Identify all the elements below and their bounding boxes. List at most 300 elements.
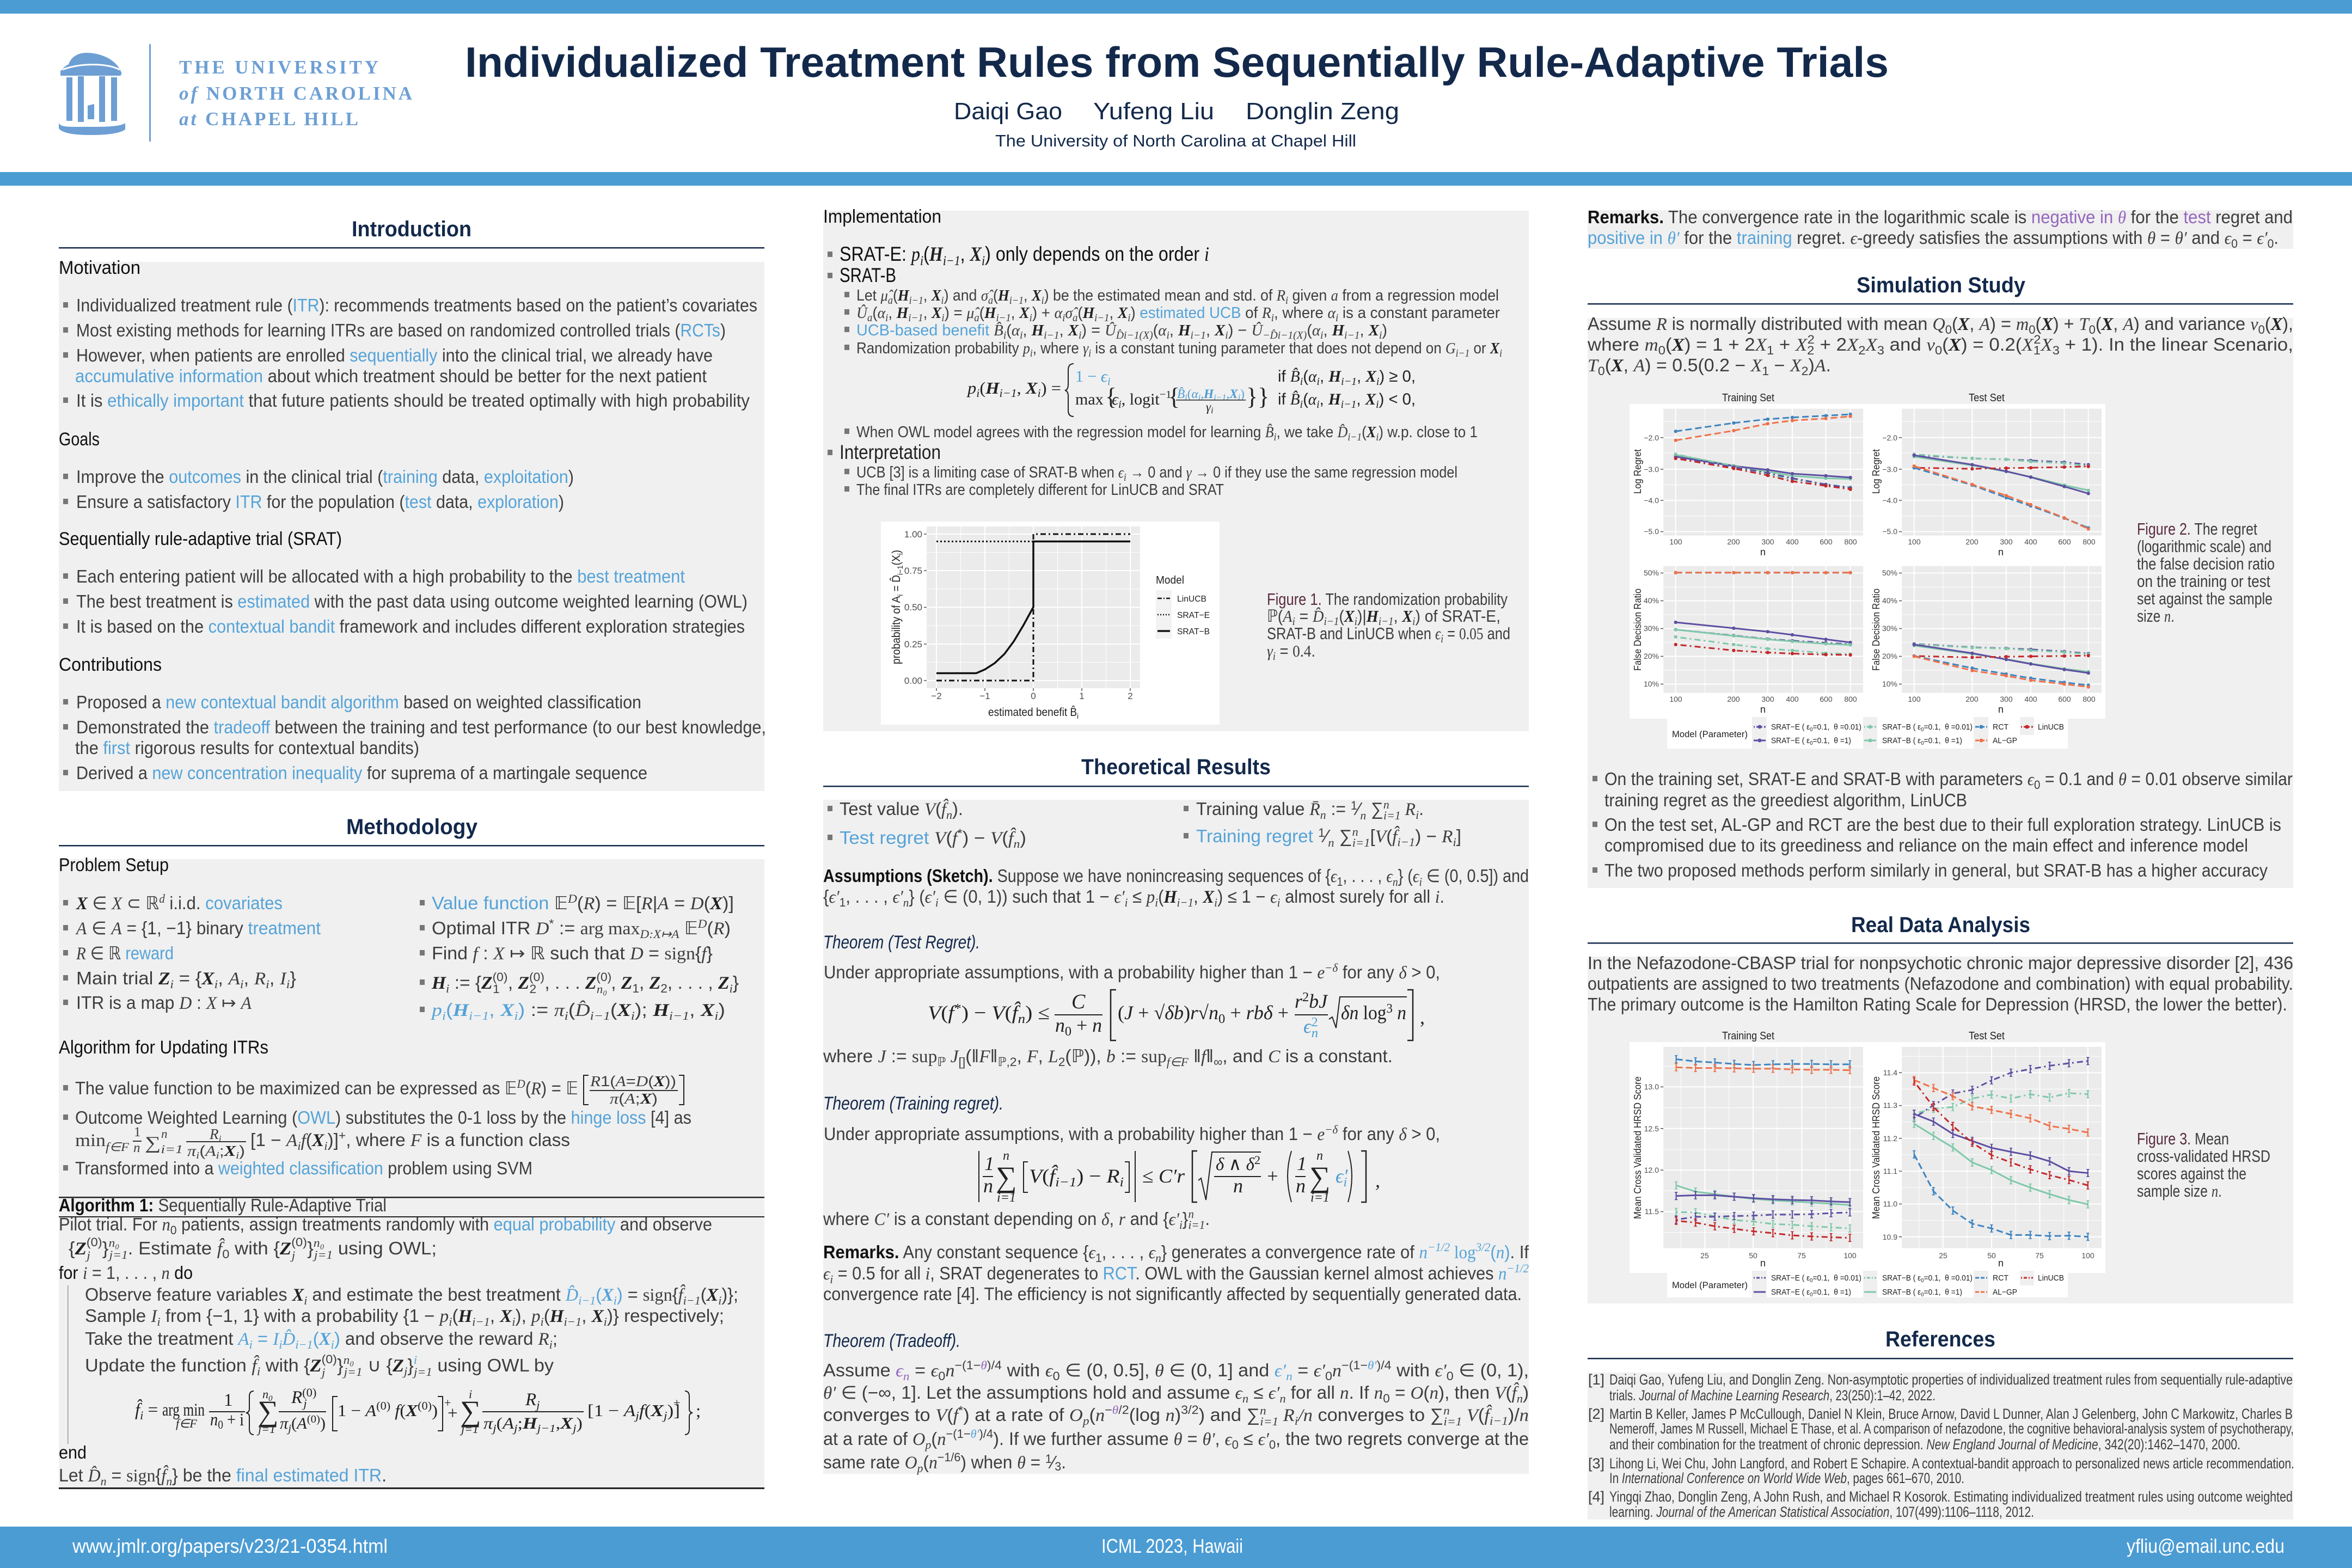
theorem: training regret: Theorem (Training regret).	[823, 1093, 1003, 1114]
theorem: test regret: f‖	[1201, 1046, 1214, 1067]
equation: randomization probability: i−1	[1341, 376, 1357, 388]
theorem: tradeoff: n	[1332, 1361, 1342, 1381]
right: test set HRSD	[1914, 1061, 2088, 1237]
authors: Yufeng Liu	[1093, 98, 1214, 125]
equation: update rule: arg min	[162, 1400, 205, 1420]
series: SRAT-E	[936, 541, 1130, 542]
theorem: tradeoff: i−1	[1490, 1414, 1508, 1428]
equation: randomization probability: {	[1168, 383, 1180, 410]
equation: training regret bound: i	[1120, 1175, 1124, 1190]
list: SRAT implementation: ) and	[944, 287, 981, 304]
axis labels: −3.0	[1882, 465, 1897, 474]
equation: randomization probability: ϵ	[1112, 390, 1118, 408]
subheading: Contributions: Contributions	[59, 654, 162, 675]
equation: training regret bound: ϵ′	[1336, 1165, 1347, 1187]
list: algorithm bullets: n	[133, 1141, 140, 1155]
theorem: training regret: for any	[1338, 1124, 1399, 1144]
text: remarks on convergence: 3/2	[1475, 1240, 1490, 1254]
algorithm pseudocode: Sample I	[85, 1306, 157, 1326]
axis labels: 10.9	[1883, 1233, 1897, 1241]
text: simulation setup: + 1). In the linear Scenario,	[2060, 334, 2293, 354]
algorithm pseudocode: j	[320, 1365, 325, 1379]
axis labels: 100	[1908, 537, 1921, 546]
list: regret definitions: i=1	[1352, 836, 1370, 849]
list: SRAT implementation: H	[1031, 322, 1045, 339]
list: problem setup right: ,	[508, 972, 518, 993]
authors	[954, 98, 1399, 125]
equation: randomization probability: i	[1376, 399, 1379, 411]
theorem: tradeoff: .	[1061, 1452, 1066, 1472]
equation: training regret bound: 1	[1297, 1153, 1307, 1174]
list: contributions bullets: Demonstrated the tradeoff between the training and test performance (to our best knowledge,	[76, 717, 766, 737]
chart: figure 2 regret and false decision ratio	[1630, 392, 2105, 749]
text: simulation setup	[1587, 314, 2293, 378]
axis labels: −2.0	[1644, 433, 1659, 442]
list: contributions bullets	[63, 692, 766, 783]
caption: figure 1: =	[1443, 624, 1459, 643]
theorem: tradeoff: O	[1069, 1406, 1083, 1425]
theorem: tradeoff: 0	[1383, 1392, 1390, 1405]
equation: randomization probability: ,	[1017, 378, 1026, 397]
list: algorithm bullets: R1(A=D(X))	[590, 1073, 676, 1089]
caption: figure 2: size n.	[2137, 607, 2175, 626]
text: assumptions: (	[1158, 886, 1163, 906]
list: problem setup right: i−1	[590, 1009, 610, 1022]
panel: remarks: .	[2274, 228, 2278, 248]
list: SRAT implementation: H	[897, 287, 910, 304]
list: SRAT implementation: i−1	[1094, 312, 1109, 324]
list: algorithm bullets: )]	[328, 1130, 339, 1150]
list: SRAT implementation: γ → 0 if they use the same regression model	[1186, 464, 1496, 481]
axis labels: Mean Cross Validated HRSD Score	[1632, 1076, 1643, 1219]
axis labels: −2.0	[1882, 433, 1897, 442]
list: problem setup right: i	[514, 1009, 518, 1022]
reference 4	[1588, 1489, 2293, 1520]
text: remarks on convergence: convergence rate [4]. The efficiency is not significantly affected by sequentially generated data.	[823, 1284, 1522, 1304]
list: SRAT implementation: σ̂	[981, 287, 994, 304]
text: assumptions: ≤	[1128, 886, 1147, 906]
equation: randomization probability: X	[1025, 378, 1038, 397]
list: SRAT implementation: i	[1042, 295, 1044, 307]
reference 3: In International Conference on World Wide Web, pages 661–670, 2010.	[1609, 1470, 1964, 1486]
text: simulation setup: 0	[1658, 344, 1665, 357]
theorem: test regret: Theorem (Test Regret).	[823, 932, 980, 953]
algorithm pseudocode: p	[439, 1307, 449, 1326]
equation: randomization probability: i	[1300, 376, 1303, 388]
text: simulation setup: Assume R is normally distributed with mean Q	[1588, 314, 1945, 334]
theorem: tradeoff: n	[1260, 1404, 1266, 1417]
theorem: tradeoff: R	[1278, 1406, 1295, 1425]
algorithm pseudocode: using OWL by	[432, 1355, 554, 1375]
text: remarks on convergence: −1/2	[1428, 1240, 1450, 1254]
theorem: tradeoff: n	[1520, 1406, 1529, 1425]
equation: update rule: (0)	[418, 1399, 432, 1412]
list: simulation findings: On the test set, AL-GP and RCT are the best due to their full exploration strategy. LinUCB is	[1604, 814, 2281, 835]
list: algorithm bullets: f∈F	[106, 1140, 129, 1154]
axis tick labels: 0.00	[904, 676, 922, 686]
theorem: tradeoff: 3	[1055, 1460, 1061, 1473]
heading: Theoretical Results: Theoretical Results	[1081, 755, 1271, 779]
list: regret definitions: )	[1020, 828, 1026, 848]
list: SRAT implementation: i	[1020, 329, 1023, 341]
theorem: tradeoff: n	[903, 1369, 910, 1383]
equation: update rule: )]	[667, 1401, 680, 1420]
list: problem setup right: D̂	[574, 1000, 590, 1020]
algorithm pseudocode: i	[257, 1364, 260, 1378]
list: SRAT implementation: ,	[1011, 304, 1019, 322]
text: remarks on convergence: i	[830, 1272, 833, 1286]
list: problem setup right: R) = 𝔼[R|A = D(X)]	[583, 893, 733, 914]
list: SRAT implementation: H	[1332, 322, 1345, 339]
list: problem setup right: := π	[530, 1000, 563, 1020]
axis tick labels: 2	[1128, 691, 1133, 701]
axis labels: 400	[2024, 537, 2037, 546]
list: SRAT implementation: ) =	[1081, 322, 1105, 339]
algorithm pseudocode: p	[530, 1307, 541, 1326]
algorithm pseudocode: final estimated ITR.	[236, 1465, 387, 1485]
list: regret definitions: n	[1383, 798, 1389, 811]
list: SRAT implementation: α	[1158, 322, 1167, 339]
theorem: tradeoff: ) and ∑	[1199, 1405, 1260, 1425]
text: assumptions: i	[1214, 896, 1217, 909]
panel: real data analysis	[1588, 953, 2293, 1303]
equation: update rule	[135, 1386, 701, 1436]
list: simulation findings: training regret as the greediest algorithm, LinUCB	[1604, 790, 1967, 810]
list: problem setup right: D	[697, 917, 707, 930]
equation: update rule: 0	[268, 1394, 273, 1403]
equation: randomization probability: (	[1303, 367, 1308, 385]
list: SRAT implementation: , where	[1274, 304, 1327, 322]
legend: figure 2: LinUCB	[2038, 722, 2064, 732]
equation: randomization probability: H	[1328, 390, 1342, 408]
list: SRAT implementation: a from a regression model	[1331, 287, 1513, 304]
equation: test regret bound: ) ≤	[1025, 1002, 1050, 1024]
theorem: tradeoff: n	[945, 1361, 954, 1381]
text: simulation setup: 2	[1858, 344, 1865, 357]
legend: figure 3: SRAT−E ( ε	[1771, 1288, 1814, 1297]
list: SRAT implementation: , where	[1033, 340, 1083, 357]
algorithm pseudocode: ,	[490, 1306, 500, 1326]
legend: figure 3: =0.1, θ =1)	[1813, 1288, 1851, 1297]
axis labels: False Decision Ratio	[1632, 589, 1643, 671]
equation: update rule: j	[535, 1398, 540, 1412]
list: problem setup left: i	[286, 977, 290, 991]
list: SRAT implementation: X	[1031, 287, 1042, 304]
list: SRAT implementation: is a constant parameter	[1338, 304, 1500, 322]
equation: randomization probability: α	[1308, 390, 1317, 408]
theorem: training regret: }	[1183, 1209, 1188, 1229]
text: real data description	[1588, 953, 2293, 1014]
authors: Daiqi Gao	[954, 98, 1062, 125]
list: SRAT implementation: α	[1055, 304, 1063, 322]
list: SRAT implementation: X	[1368, 322, 1380, 339]
list: SRAT implementation: Let μ̂	[856, 287, 889, 304]
equation: test regret bound: V(f	[928, 1002, 953, 1024]
text: assumptions: ϵ	[1270, 887, 1278, 907]
equation: update rule: j	[491, 1423, 497, 1435]
list: regret definitions: i	[1416, 808, 1419, 822]
equation: update rule: (0)	[307, 1413, 320, 1425]
theorem: test regret: ℙ,2	[998, 1055, 1016, 1069]
subheading: Goals: Goals	[59, 429, 100, 450]
list: algorithm bullets: f	[301, 1131, 308, 1150]
axis labels: 50%	[1882, 568, 1897, 577]
theorem: tradeoff: converges to V(f	[823, 1405, 958, 1425]
legend: figure 3: =0.1, θ =0.01)	[1924, 1273, 1973, 1283]
list: problem setup right: (0)	[529, 970, 544, 984]
list: SRAT implementation: → 0 and	[1126, 464, 1186, 481]
equation: update rule: ∑	[460, 1395, 481, 1428]
list: algorithm bullets: (	[525, 1078, 531, 1098]
equation: training regret bound: +	[1266, 1165, 1279, 1187]
axis labels: 200	[1965, 537, 1979, 546]
theorem: tradeoff: 3/2	[1181, 1403, 1199, 1417]
list: problem setup right: p	[431, 1001, 442, 1020]
axis tick labels: 0.75	[904, 566, 922, 576]
algorithm pseudocode: } be the	[172, 1465, 236, 1485]
list: SRAT implementation: a	[888, 295, 893, 307]
axis title: y: (X	[890, 555, 903, 565]
legend: SRAT−E	[1177, 611, 1210, 620]
algorithm pseudocode: end	[59, 1442, 87, 1462]
theorem: tradeoff: n	[929, 1453, 938, 1473]
equation: update rule: ;	[696, 1401, 701, 1421]
list: SRAT implementation: i	[1124, 471, 1126, 483]
equation: randomization probability: −1	[1160, 389, 1171, 401]
theorem: training regret: Under appropriate assumptions, with a probability higher than 1 − e	[824, 1124, 1344, 1144]
list: problem setup right: , . . . ,	[667, 972, 718, 993]
axis labels: n	[1760, 547, 1766, 558]
panel: remarks: =	[2238, 228, 2257, 248]
algorithm pseudocode: and observe the reward R	[345, 1328, 549, 1349]
list: simulation findings: θ = 0.01 observe similar	[2118, 769, 2308, 789]
axis labels: Log Regret	[1871, 449, 1882, 494]
theorem: test regret: for any	[1338, 962, 1399, 982]
list: problem setup right: i	[631, 1009, 635, 1022]
list: SRAT implementation: SRAT-B	[840, 264, 896, 286]
subheading: SRAT: Sequentially rule-adaptive trial (SRAT)	[59, 529, 342, 549]
bottom-right: test false decision ratio	[1914, 644, 2088, 687]
text: remarks on convergence: } generates a convergence rate of	[1161, 1242, 1419, 1262]
algorithm pseudocode: ∪ {	[362, 1355, 393, 1375]
equation: randomization probability: ) =	[1041, 378, 1061, 397]
text: simulation setup: X) + T	[2041, 314, 2089, 334]
list: SRAT implementation: ,	[1059, 322, 1068, 339]
legend: figure 3: SRAT−B ( ε	[1882, 1288, 1925, 1297]
equation: test regret bound: n	[1055, 1014, 1065, 1036]
footer: paper link: www.jmlr.org/papers/v23/21-0354.html	[72, 1535, 388, 1557]
text: assumptions	[823, 866, 1529, 909]
theorem: tradeoff: 0	[1325, 1369, 1332, 1383]
theorem: tradeoff: (f̂	[1478, 1405, 1490, 1425]
text: remarks on convergence: 1	[1095, 1251, 1102, 1265]
equation: update rule: A	[503, 1414, 512, 1432]
equation: update rule: =	[143, 1400, 158, 1420]
list: problem setup left: covariates	[205, 893, 283, 913]
panel: references	[1588, 1371, 2294, 1520]
theorem: test regret: , and	[1222, 1046, 1268, 1066]
equation: training regret bound: i−1	[1055, 1175, 1076, 1190]
algorithm pseudocode: ;	[553, 1328, 558, 1349]
equation: randomization probability: i	[1300, 399, 1303, 411]
caption: figure 1: =	[1276, 641, 1293, 660]
theorem: tradeoff: ). If we further assume	[993, 1429, 1174, 1449]
text: remarks on convergence: = 0.5 for all	[833, 1263, 926, 1283]
axis title: y: )	[890, 550, 903, 553]
equation: training regret bound: δ ∧ δ	[1216, 1155, 1254, 1174]
list: SRAT implementation: (	[1077, 304, 1083, 322]
algorithm title: Algorithm 1: Sequentially Rule-Adaptive Trial	[59, 1195, 387, 1215]
legend: figure 2: 0	[1810, 727, 1813, 733]
list: regret definitions: [	[1370, 826, 1375, 846]
text: simulation setup: 0	[1598, 364, 1605, 378]
list: SRAT implementation: i	[1271, 312, 1274, 324]
algorithm pseudocode: n	[101, 1474, 107, 1488]
algorithm pseudocode: i−1	[295, 1338, 313, 1351]
axis labels: 20%	[1882, 652, 1897, 660]
list: regret definitions: n	[1320, 808, 1326, 822]
caption: figure 1: i	[1273, 650, 1276, 663]
list: algorithm bullets: A	[204, 1143, 216, 1159]
algorithm pseudocode: Update the function f̂	[85, 1355, 256, 1376]
list: algorithm bullets: Transformed into a weighted classification problem using SVM	[75, 1158, 532, 1178]
list: problem setup right: X	[700, 1001, 715, 1020]
plot titles: Test Set	[1969, 1030, 2005, 1042]
axis labels: 300	[2000, 695, 2013, 703]
axis labels: 600	[2058, 537, 2071, 546]
text: simulation setup: 0	[2258, 323, 2265, 336]
equation: training regret bound: ) −	[1076, 1165, 1106, 1187]
theorem: test regret: 2	[1058, 1055, 1065, 1069]
reference 4: learning. Journal of the American Statistical Association, 107(499):1106–1118, 2012.	[1609, 1504, 2034, 1520]
list: SRAT implementation: ) w.p. close to 1	[1379, 424, 1478, 441]
list: SRAT implementation: D̂i−1(X)	[1116, 329, 1153, 341]
list: problem setup right: Z	[649, 973, 660, 993]
equation: randomization probability: γ	[1206, 400, 1211, 414]
theorem: tradeoff: ϵ′	[1314, 1361, 1326, 1381]
algorithm pseudocode: i	[541, 1315, 544, 1328]
equation: test regret bound: ϵ	[1303, 1015, 1312, 1037]
list: problem setup left: d	[159, 892, 166, 905]
list: problem setup right: 2	[530, 982, 536, 996]
equation: update rule: j−1	[535, 1423, 556, 1435]
list: goals bullets: Ensure a satisfactory ITR for the population (test data, exploration)	[76, 492, 564, 512]
equation: randomization probability: ,	[1320, 390, 1328, 408]
theorem: tradeoff: /n	[1297, 1406, 1313, 1425]
algorithm pseudocode: j	[402, 1364, 407, 1378]
list: problem setup left: i	[215, 977, 218, 991]
equation: update rule: i	[469, 1387, 472, 1401]
series: SRAT-B	[936, 541, 1130, 673]
theorem: tradeoff: −(1−	[946, 1427, 971, 1441]
axis labels: 11.2	[1883, 1134, 1897, 1143]
list: problem setup left: ,	[218, 968, 229, 988]
text: simulation setup: X	[1846, 335, 1859, 355]
equation: training regret bound: n	[1233, 1175, 1243, 1197]
equation: training regret bound: n	[1296, 1175, 1306, 1197]
theorem: tradeoff: *	[958, 1404, 964, 1417]
list: problem setup right: ,	[639, 972, 650, 993]
algorithm pseudocode: X	[499, 1307, 512, 1326]
equation: randomization probability: i	[1118, 399, 1122, 411]
list: SRAT implementation: is a constant tuning parameter that does not depend on	[1091, 340, 1445, 357]
list: problem setup right: n₀	[597, 982, 607, 996]
text: simulation setup: X	[1864, 335, 1878, 355]
caption: figure 2: Figure 2. The regret	[2137, 519, 2257, 538]
plot titles	[1722, 392, 2005, 404]
theorem: test regret: ‖	[1189, 1046, 1201, 1066]
caption: figure 3: scores against the	[2137, 1164, 2246, 1183]
list: SRAT implementation	[828, 243, 1502, 499]
equation: update rule: ∑	[258, 1395, 279, 1428]
list: algorithm bullets: D	[517, 1077, 525, 1091]
legend: figure 2: SRAT−B ( ε	[1882, 736, 1925, 745]
list: SRAT implementation: a	[867, 312, 873, 324]
equation: test regret bound: +	[1071, 1014, 1092, 1036]
list: regret definitions: :=	[1326, 799, 1351, 819]
list: SRAT implementation: ,	[1024, 287, 1032, 304]
list: SRAT implementation: X	[1214, 322, 1226, 339]
list: problem setup right: (	[577, 893, 583, 913]
list: SRAT implementation: i	[1079, 329, 1081, 341]
list: SRAT implementation: Û	[856, 304, 868, 322]
theorem: training regret: .	[1205, 1209, 1210, 1229]
list: SRAT implementation: R	[1276, 287, 1285, 304]
theorem: test regret: F‖	[979, 1046, 997, 1067]
legend: figure 2: SRAT−E ( ε	[1771, 722, 1814, 732]
list: SRAT implementation: )	[1131, 304, 1140, 322]
caption: figure 1: Figure 1. The randomization probability	[1267, 590, 1508, 609]
equation: randomization probability: ,	[1226, 387, 1229, 401]
caption: figure 1: ,	[1394, 607, 1402, 626]
caption: figure 1: X	[1401, 607, 1413, 626]
axis labels: Log Regret	[1632, 449, 1643, 494]
caption: figure 1: γ	[1267, 641, 1273, 660]
text: remarks on convergence: −1/2	[1506, 1261, 1529, 1275]
equation: update rule: )	[432, 1401, 438, 1420]
algorithm pseudocode: {Z	[69, 1238, 86, 1259]
list: SRAT implementation: (	[1153, 322, 1159, 339]
equation: randomization probability: (	[1187, 387, 1192, 401]
list: regret definitions: n	[1328, 836, 1334, 849]
equation: update rule: f	[639, 1401, 647, 1420]
algorithm pseudocode: D̂	[565, 1285, 578, 1305]
list: problem setup left: X	[201, 969, 215, 989]
text: remarks on convergence: n	[1419, 1243, 1428, 1263]
icon: UNC Old Well logo	[59, 53, 125, 135]
axis labels: 200	[1965, 695, 1979, 703]
algorithm pseudocode: ),	[516, 1306, 531, 1326]
algorithm pseudocode: i−1	[683, 1294, 701, 1307]
theorem: tradeoff: n	[1443, 1404, 1450, 1417]
axis tick labels	[904, 529, 1133, 701]
equation: randomization probability: i	[1316, 399, 1320, 411]
text: assumptions: ϵ′	[925, 887, 936, 907]
equation: randomization probability: if B̂	[1278, 367, 1300, 385]
axis labels: n	[1760, 1258, 1766, 1269]
caption: figure 1: (	[1339, 607, 1344, 626]
algorithm pseudocode: Z	[310, 1356, 321, 1376]
axis labels: 11.3	[1883, 1101, 1897, 1110]
list: problem setup right: X	[500, 1001, 515, 1020]
list: algorithm bullets: i	[236, 1150, 239, 1161]
university wordmark	[179, 57, 413, 130]
chart: figure 1 randomization probability	[881, 522, 1220, 725]
list: algorithm bullets: )	[239, 1143, 245, 1159]
equation: randomization probability: , logit	[1122, 390, 1160, 408]
algorithm pseudocode: )} respectively;	[607, 1306, 724, 1326]
list: SRAT implementation: i−1	[1347, 431, 1362, 443]
